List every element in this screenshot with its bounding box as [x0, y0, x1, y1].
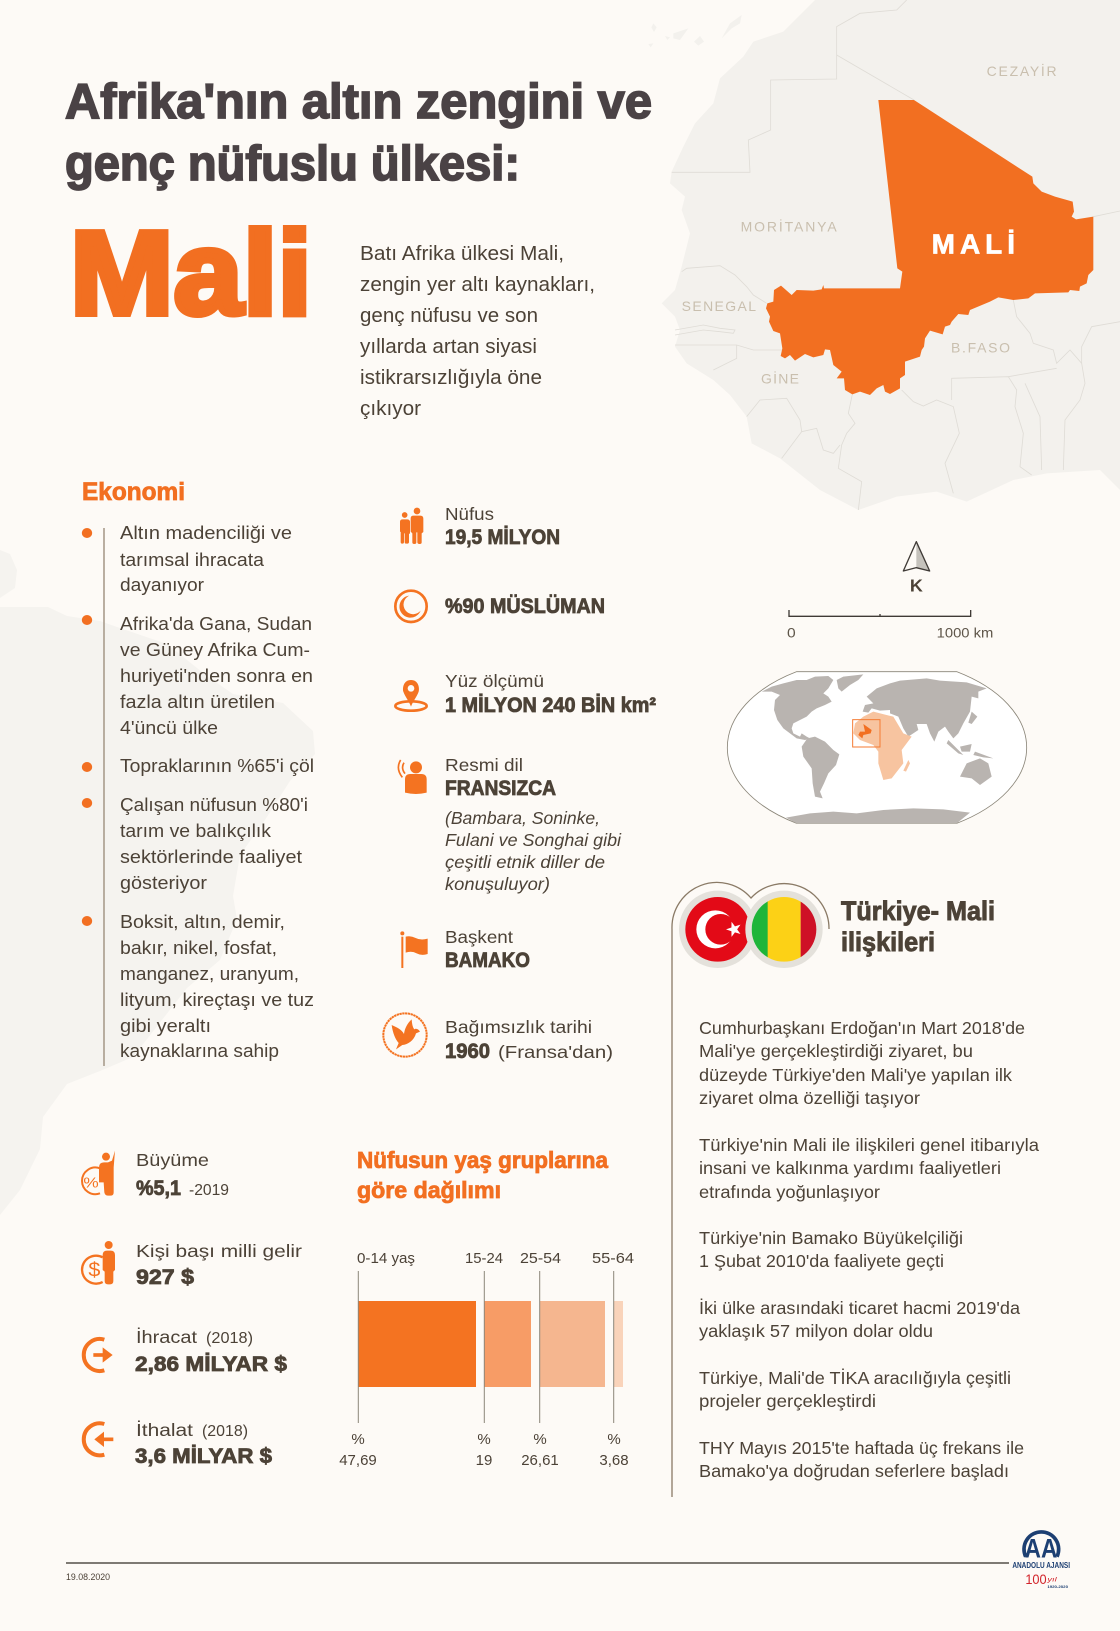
- icon: growth: %: [83, 1175, 99, 1191]
- economy text list: Afrika'da Gana, Sudan: [120, 613, 312, 634]
- age labels: 0-14 yaş: [357, 1250, 415, 1267]
- intro text: yıllarda artan siyasi: [360, 336, 537, 358]
- intro text: istikrarsızlığıyla öne: [360, 367, 542, 389]
- Mali highlight: [858, 724, 872, 738]
- map: West Africa with Mali: [648, 0, 1120, 510]
- percentage labels: 26,61: [521, 1452, 559, 1469]
- relations text: [699, 1018, 1039, 1481]
- growth: Büyüme: [136, 1150, 209, 1170]
- frame arc line: [672, 882, 829, 1497]
- exports: (2018): [206, 1330, 253, 1347]
- panel: economy: [82, 478, 314, 1066]
- economy text list: lityum, kireçtaşı ve tuz: [120, 989, 314, 1010]
- percentage labels: %: [607, 1431, 621, 1448]
- icon: flag: [400, 931, 428, 968]
- official language: Resmi dil: [445, 755, 523, 775]
- icon: north arrow: [916, 542, 930, 571]
- relations text: etrafında yoğunlaşıyor: [699, 1182, 880, 1202]
- chart heading: Nüfusun yaş gruplarına: [357, 1147, 608, 1173]
- icon: income: $: [88, 1260, 100, 1282]
- note: ethnic languages: Fulani ve Songhai gibi: [445, 830, 622, 850]
- scale bar: [789, 610, 971, 616]
- relations text: THY Mayıs 2015'te haftada üç frekans ile: [699, 1438, 1024, 1458]
- scale labels: 0: [787, 625, 796, 641]
- label: Cezayir: CEZAYİR: [987, 62, 1057, 79]
- note: ethnic languages: konuşuluyor): [445, 874, 550, 894]
- capital: [445, 927, 530, 972]
- label: Senegal: SENEGAL: [682, 298, 756, 314]
- growth: %5,1: [136, 1177, 181, 1200]
- independence: (Fransa'dan): [498, 1042, 613, 1062]
- population: 19,5 MİLYON: [445, 526, 560, 549]
- relations text: 1 Şubat 2010'da faaliyete geçti: [699, 1251, 944, 1271]
- background map: South America: [0, 550, 315, 1215]
- age labels: 55-64: [592, 1250, 634, 1267]
- religion: %90 MÜSLÜMAN: [445, 595, 605, 618]
- logo: Anadolu Ajansı: ANADOLU AJANSI: [1012, 1560, 1070, 1570]
- economy text list: kaynaklarına sahip: [120, 1040, 279, 1061]
- exports: İhracat: [136, 1327, 197, 1347]
- icon: import arrow: [84, 1423, 113, 1455]
- country borders: [672, 0, 1120, 510]
- relations heading: Türkiye- Mali: [841, 896, 995, 926]
- imports: İthalat: [136, 1420, 193, 1440]
- age labels: 15-24: [465, 1250, 503, 1267]
- icon: speaker: [398, 760, 427, 794]
- intro text: [360, 243, 595, 420]
- capital: BAMAKO: [445, 949, 530, 972]
- label: Gine: GİNE: [761, 369, 799, 386]
- relations text: yaklaşık 57 milyon dolar oldu: [699, 1321, 933, 1341]
- intro text: zengin yer altı kaynakları,: [360, 274, 595, 296]
- icon: location pin: [395, 680, 427, 711]
- Africa highlight: [853, 712, 912, 780]
- label: Burkina Faso: B.FASO: [951, 340, 1010, 356]
- economy text list: [120, 522, 314, 1061]
- panel: age distribution chart: [339, 1147, 634, 1469]
- intro text: Batı Afrika ülkesi Mali,: [360, 243, 564, 265]
- economy text list: gösteriyor: [120, 872, 207, 893]
- locator box: [853, 720, 880, 747]
- area: 1 MİLYON 240 BİN km²: [445, 694, 656, 717]
- relations heading: [841, 896, 995, 957]
- timeline line: [103, 528, 105, 1066]
- exports: 2,86 MİLYAR $: [135, 1353, 287, 1376]
- area: Yüz ölçümü: [445, 671, 544, 691]
- percentage labels: %: [533, 1431, 547, 1448]
- icon: income: [82, 1241, 115, 1284]
- intro text: çıkıyor: [360, 398, 421, 420]
- heading: Mali: Mali: [70, 207, 312, 340]
- economy text list: tarımsal ihracata: [120, 549, 265, 570]
- icon: Mali flag: [745, 891, 823, 968]
- relations text: Türkiye'nin Mali ile ilişkileri genel itibarıyla: [699, 1135, 1039, 1155]
- label: Moritanya: MORİTANYA: [741, 218, 837, 235]
- icon: export arrow: [84, 1339, 113, 1371]
- compass and scale: [787, 542, 993, 641]
- official language: [445, 755, 622, 894]
- relations text: Mali'ye gerçekleştirdiği ziyaret, bu: [699, 1041, 973, 1061]
- date: 19.08.2020: [66, 1572, 110, 1582]
- title: Afrika'nın altın zengini ve: [65, 75, 652, 129]
- panel: key facts: [383, 504, 656, 1063]
- note: ethnic languages: [445, 808, 622, 894]
- logo: Anadolu Ajansı: AA: [1025, 1533, 1057, 1563]
- economy text list: dayanıyor: [120, 574, 204, 595]
- economy text list: 4'üncü ülke: [120, 717, 218, 738]
- title: genç nüfuslu ülkesi:: [65, 137, 520, 191]
- age labels: [357, 1250, 634, 1267]
- footer line: [66, 1562, 1009, 1564]
- percentage labels: 19: [476, 1452, 492, 1469]
- age labels: 25-54: [520, 1250, 561, 1267]
- note: ethnic languages: (Bambara, Soninke,: [445, 808, 600, 828]
- Mali shape: [766, 100, 1093, 395]
- heading: Ekonomi: Ekonomi: [82, 478, 185, 506]
- title: [65, 75, 652, 191]
- compass and scale: 1000 km: [937, 625, 993, 641]
- icon: crescent: [395, 591, 427, 622]
- economy text list: sektörlerinde faaliyet: [120, 846, 302, 867]
- income per capita: [136, 1241, 302, 1289]
- income per capita: 927 $: [136, 1266, 194, 1289]
- independence: Bağımsızlık tarihi: [445, 1017, 592, 1037]
- logo: Anadolu Ajansı: 1920-2020: [1047, 1585, 1068, 1589]
- panel: Turkey-Mali relations: [672, 882, 1039, 1497]
- relations text: projeler gerçekleştirdi: [699, 1391, 876, 1411]
- logo: Anadolu Ajansı: yıl: [1046, 1576, 1057, 1583]
- relations heading: ilişkileri: [841, 927, 935, 957]
- population: Nüfus: [445, 504, 494, 524]
- area: [445, 671, 656, 717]
- imports: [135, 1420, 272, 1468]
- percentage labels: %: [477, 1431, 491, 1448]
- imports: (2018): [202, 1423, 248, 1440]
- percentage labels: 47,69: [339, 1452, 377, 1469]
- north label: K: [910, 576, 923, 596]
- economy text list: Topraklarının %65'i çöl: [120, 755, 314, 776]
- economy text list: fazla altın üretilen: [120, 691, 275, 712]
- land mass: [648, 0, 1120, 510]
- economy text list: huriyeti'nden sonra en: [120, 665, 313, 686]
- chart heading: [357, 1147, 608, 1203]
- logo: Anadolu Ajansı: 100: [1025, 1571, 1047, 1587]
- icon: dove: [383, 1013, 427, 1057]
- economy text list: Altın madenciliği ve: [120, 522, 292, 543]
- relations text: ziyaret olma özelliği taşıyor: [699, 1088, 920, 1108]
- economy text list: ve Güney Afrika Cum-: [120, 639, 310, 660]
- population: [445, 504, 560, 549]
- relations text: Cumhurbaşkanı Erdoğan'ın Mart 2018'de: [699, 1018, 1025, 1038]
- relations text: Türkiye, Mali'de TİKA aracılığıyla çeşitli: [699, 1368, 1011, 1388]
- independence: [445, 1017, 613, 1063]
- growth: [136, 1150, 229, 1200]
- bar chart: [358, 1271, 623, 1423]
- official language: FRANSIZCA: [445, 777, 556, 800]
- percentage labels: 3,68: [599, 1452, 629, 1469]
- economy text list: manganez, uranyum,: [120, 963, 299, 984]
- bullets: [82, 528, 92, 926]
- exports: [135, 1327, 287, 1376]
- independence: 1960: [445, 1040, 490, 1063]
- icon: growth: [82, 1151, 115, 1196]
- percentage labels: [339, 1431, 629, 1469]
- world locator map: [727, 672, 1027, 823]
- relations text: Türkiye'nin Bamako Büyükelçiliği: [699, 1228, 963, 1248]
- economy text list: tarım ve balıkçılık: [120, 820, 272, 841]
- economy text list: Çalışan nüfusun %80'i: [120, 794, 308, 815]
- panel: economic indicators: [82, 1150, 302, 1468]
- relations text: İki ülke arasındaki ticaret hacmi 2019'da: [699, 1298, 1020, 1318]
- relations text: Bamako'ya doğrudan seferlere başladı: [699, 1461, 1009, 1481]
- label: Mali on map: MALİ: [932, 228, 1015, 259]
- intro text: genç nüfusu ve son: [360, 305, 538, 327]
- logo: Anadolu Ajansı: [1012, 1532, 1070, 1589]
- relations text: düzeyde Türkiye'den Mali'ye yapılan ilk: [699, 1065, 1012, 1085]
- percentage labels: %: [351, 1431, 365, 1448]
- growth: -2019: [189, 1182, 229, 1199]
- economy text list: Boksit, altın, demir,: [120, 911, 285, 932]
- icon: Turkish flag: [679, 891, 756, 968]
- income per capita: Kişi başı milli gelir: [136, 1241, 302, 1261]
- note: ethnic languages: çeşitli etnik diller de: [445, 852, 605, 872]
- icon: people: [400, 508, 423, 544]
- chart heading: göre dağılımı: [357, 1177, 501, 1203]
- imports: 3,6 MİLYAR $: [135, 1445, 272, 1468]
- economy text list: bakır, nikel, fosfat,: [120, 937, 277, 958]
- relations text: insani ve kalkınma yardımı faaliyetleri: [699, 1158, 1001, 1178]
- capital: Başkent: [445, 927, 513, 947]
- economy text list: gibi yeraltı: [120, 1015, 211, 1036]
